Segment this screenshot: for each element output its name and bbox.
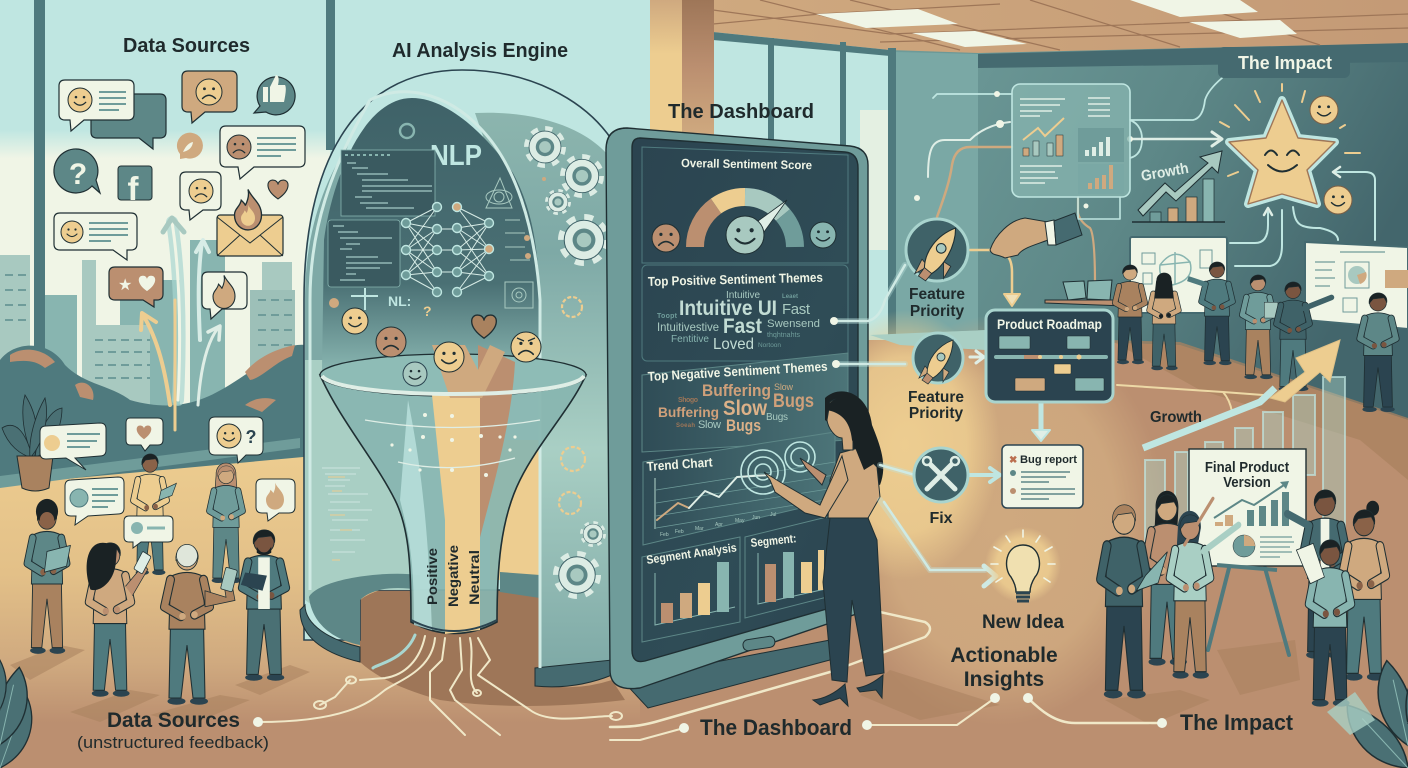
whiteboards: [1045, 237, 1408, 329]
code window 1: [341, 150, 435, 216]
gauge face: [726, 216, 764, 254]
potted plant: [2, 395, 62, 491]
icon: feature priority rocket 1: [906, 219, 968, 281]
month labels: May: [735, 518, 745, 524]
easel legs: [1208, 568, 1289, 655]
board title: Version: [1223, 473, 1271, 490]
person: man in suit: [1287, 490, 1347, 659]
person: bearded man with jacket: [241, 530, 286, 681]
person: with tablet behind: [134, 454, 176, 575]
shoes: [813, 675, 883, 706]
word cloud: Fentitive: [671, 334, 709, 345]
milestones: [999, 336, 1104, 391]
badge: The Impact: [1218, 47, 1350, 78]
stream: pale positive: [400, 400, 432, 630]
feedback bubbles cloud: [54, 71, 305, 319]
far windows: [700, 0, 910, 340]
person: afro with tablet: [28, 499, 70, 654]
trend line: [657, 475, 770, 520]
bubble: sad tan: [182, 71, 237, 123]
bubble: flame: [202, 272, 247, 319]
inner dark arch: [322, 98, 540, 370]
right glass panel: [475, 113, 612, 672]
panel: product roadmap: [986, 310, 1113, 402]
label: Feature Priority 1: Feature: [909, 286, 965, 303]
word cloud: thqhtnahts: [767, 332, 800, 339]
month labels: Apr: [715, 522, 723, 528]
person: man with arm raised: [1188, 262, 1233, 365]
person: holding clipboard right: [1360, 293, 1396, 412]
person: woman with bun: [1342, 501, 1386, 681]
dashboard device: [606, 128, 868, 708]
month labels: [660, 512, 776, 538]
decorative corner plants: [0, 640, 1408, 768]
right floor: [640, 345, 1408, 768]
woman at dashboard: [764, 391, 884, 706]
star with smiles: [1220, 84, 1360, 214]
word cloud: Buffering: [658, 404, 719, 420]
board 2: [1305, 242, 1408, 329]
person: pointing at board: [1276, 282, 1332, 391]
people: feedback crowd: [28, 454, 286, 705]
icon: sad face: [376, 327, 406, 357]
funnel rings: [365, 420, 540, 468]
people: final review team: [1101, 490, 1386, 707]
month labels: Feb: [660, 532, 669, 538]
label: Growth on floor: Growth: [1150, 409, 1202, 426]
AI analysis dome: [300, 70, 625, 706]
column: [650, 0, 682, 135]
title: Segment:: [750, 531, 797, 550]
people: back team: [1115, 262, 1396, 412]
month labels: Feb: [675, 529, 684, 535]
happy face: [810, 222, 836, 248]
gauge: [695, 197, 795, 247]
word cloud: [658, 381, 814, 435]
dome base band: [300, 572, 612, 687]
bubble: happy review: [54, 213, 137, 260]
center window: [330, 0, 660, 470]
left window with sky: [0, 0, 340, 480]
bubble: sad review: [220, 126, 305, 179]
title: Top Negative Sentiment Themes: [647, 359, 828, 384]
bubble: smile review: [59, 80, 134, 131]
label: Feature Priority 1: Priority: [910, 303, 965, 320]
screen: [632, 138, 858, 662]
word cloud: Swensend: [767, 318, 820, 330]
rim interior: [320, 354, 586, 396]
board chart: [1214, 481, 1289, 526]
icon: smile face: [342, 308, 368, 334]
title: Overall Sentiment Score: [681, 156, 812, 172]
heading: Data Sources: Data Sources: [123, 35, 250, 57]
sparkle data: [390, 413, 517, 477]
person: with clipboard: [1115, 265, 1145, 364]
tan floor seen through dome: [490, 440, 540, 580]
word cloud: Fast: [723, 315, 762, 338]
analytics hologram panel: [1012, 84, 1130, 197]
word cloud: Toopt: [657, 313, 678, 320]
neural network: [402, 202, 494, 296]
bubble: neutral review: [40, 423, 106, 470]
rays: [1220, 84, 1360, 176]
person: woman from back: [1149, 273, 1179, 370]
card title: Bug report: [1020, 454, 1077, 466]
board: [1189, 449, 1306, 566]
card: bug report: [1002, 445, 1083, 508]
icon: feather bubble: [177, 133, 203, 159]
label: Fix: Fix: [929, 510, 953, 527]
word cloud: Shogo: [678, 397, 698, 404]
person: older man with phone: [164, 544, 238, 705]
person: woman in teal sweater: [210, 463, 242, 583]
funnel rim highlight: [322, 376, 584, 394]
icon: angry face: [511, 332, 541, 362]
word cloud: Nortoon: [758, 343, 781, 349]
big arrow: [1270, 340, 1340, 402]
torso: [828, 448, 880, 518]
caption: Data Sources: Data Sources: [107, 709, 240, 732]
panel: overall sentiment: [642, 147, 848, 263]
person: woman curly hair: [87, 543, 151, 697]
crowd bubbles: [40, 417, 295, 548]
right wall: [895, 40, 1408, 420]
month labels: Jun: [752, 515, 760, 521]
axis and grid: [655, 462, 835, 529]
word cloud: Intuitivestive: [657, 320, 719, 334]
trees outside: [0, 345, 325, 485]
bezel: [606, 128, 868, 689]
bubble: fire: [256, 479, 295, 521]
caption: The Impact: The Impact: [1180, 710, 1294, 735]
badge: The Impact: The Impact: [1238, 53, 1332, 73]
word cloud: Buffering: [702, 381, 771, 400]
atom glyph and data: [400, 124, 533, 308]
bubble: heart: [126, 418, 163, 451]
bars: [758, 550, 830, 604]
star outline: [1229, 100, 1335, 204]
title: Product Roadmap: [997, 317, 1102, 332]
bubble: smile question: ?: [246, 427, 256, 447]
panel: positive themes: [642, 265, 848, 361]
funnel with sentiment streams: [320, 345, 586, 634]
glow dots: [329, 177, 546, 308]
icon: question bubble: [54, 149, 100, 193]
word cloud: Loved: [713, 336, 754, 353]
connection roots and bottom flow: [253, 612, 1167, 740]
stand base: [622, 640, 830, 708]
label: Positive: Positive: [424, 548, 440, 605]
label: Neutral: Neutral: [466, 550, 482, 605]
bubble: smile question: [209, 417, 263, 463]
bubble: star and heart: [109, 267, 163, 307]
star face: [1265, 150, 1299, 172]
easel tray: [1217, 565, 1277, 570]
needle: [758, 200, 787, 232]
person: with tablet: [1242, 275, 1278, 379]
funnel bottom edge: [411, 620, 497, 631]
title: Top Positive Sentiment Themes: [648, 270, 823, 289]
desk with laptops: [1045, 280, 1125, 306]
dome floor: [360, 585, 625, 706]
bubble: comment: [124, 516, 173, 548]
left floor: [0, 445, 640, 768]
pants: [823, 518, 884, 682]
word cloud: Slow: [698, 419, 721, 431]
heading: AI Analysis Engine: AI Analysis Engine: [392, 40, 568, 62]
label: Feature Priority 2: Priority: [909, 405, 964, 422]
word cloud: Leaet: [782, 294, 798, 300]
city skyline: [0, 240, 295, 445]
label: Actionable Insights: Insights: [964, 668, 1044, 691]
person: man from back with clipboard: [1296, 540, 1351, 707]
bubble: profile review: [65, 477, 124, 525]
home button: [742, 636, 776, 651]
word cloud: Fast: [782, 301, 811, 318]
panel: segment analysis: [642, 537, 740, 642]
easel with final product board: [1189, 449, 1306, 655]
word cloud: Intuitive UI: [679, 297, 777, 320]
word cloud: Intuitive: [726, 290, 760, 301]
person: woman in tan with dark hair: [1146, 491, 1188, 666]
face: [827, 399, 853, 450]
smile 1: [1310, 96, 1338, 124]
bubble: star and heart: ★: [118, 277, 132, 294]
upward data arrows: [141, 218, 220, 430]
icon: question bubble: ?: [69, 158, 87, 191]
fragments: NL:: [388, 293, 411, 309]
icon: neutral smile: [403, 362, 427, 386]
word cloud: Bugs: [726, 416, 761, 435]
label: Growth: [1140, 160, 1190, 185]
feedback faces falling into funnel: [342, 308, 541, 386]
panel: segment second: [745, 515, 835, 618]
right room connectors: [830, 78, 1375, 586]
timeline: [994, 354, 1108, 360]
word cloud: Soeah: [676, 423, 695, 429]
fragments: [351, 288, 432, 319]
front hair: [826, 397, 880, 470]
gears: [527, 129, 606, 595]
bubble: unhappy face: [180, 172, 221, 220]
word cloud: Bugs: [766, 412, 788, 423]
word cloud: Slow: [723, 397, 768, 420]
person: glasses man in navy sweater: [1101, 505, 1167, 698]
NLP label: NLP: [430, 140, 482, 172]
heading: The Dashboard: The Dashboard: [668, 101, 814, 123]
back hair: [825, 391, 883, 485]
window mullions: [34, 0, 896, 410]
tan spray: [432, 345, 505, 398]
person: woman pointing in pale shirt: [1170, 498, 1239, 679]
caption: The Dashboard: The Dashboard: [700, 715, 852, 740]
arch highlight: [310, 92, 540, 668]
label: Actionable Insights: Actionable: [950, 644, 1058, 667]
title: Trend Chart: [646, 454, 714, 474]
icon: thumbs up: [254, 75, 295, 115]
code window 2: [328, 220, 400, 287]
icon: fix tools: [914, 448, 968, 502]
icon: broken heart: [472, 315, 496, 338]
board 1: [1130, 237, 1227, 313]
bars: [655, 562, 735, 625]
icon: facebook: f: [128, 170, 140, 207]
stream: tan: [432, 395, 480, 634]
card: bug report: ✖: [1009, 455, 1017, 466]
icon: heart: [268, 180, 288, 199]
ghost growth bars and arrow: [1143, 340, 1345, 577]
spark gear: [559, 297, 585, 514]
lower code window: [322, 468, 372, 552]
left glass strip: [305, 145, 348, 370]
funnel glass: [320, 375, 586, 634]
icon: facebook: [118, 166, 152, 207]
icon: flaming envelope: [217, 189, 283, 256]
smile 2: [1324, 186, 1352, 214]
icon: feature priority rocket 2: [913, 333, 963, 384]
label: Negative: Negative: [445, 545, 461, 607]
month labels: Jul: [770, 512, 776, 518]
panel: negative themes: [642, 353, 848, 452]
icon: new idea bulb: [985, 527, 1061, 603]
ceiling: [705, 0, 1408, 53]
label: New Idea: New Idea: [982, 612, 1064, 633]
pie chart and notes: [1233, 535, 1294, 557]
fragments: ?: [423, 303, 432, 319]
star: [1229, 100, 1335, 204]
icon: reaching hand: [990, 213, 1082, 258]
dome glass body: [304, 70, 612, 672]
title: Segment Analysis: [645, 540, 738, 567]
word cloud: Slow: [774, 382, 794, 392]
word cloud: Bugs: [773, 391, 814, 412]
bars: [1150, 179, 1214, 222]
month labels: Mar: [695, 526, 704, 532]
arrow: [1138, 151, 1222, 216]
floor shadows: [10, 640, 1300, 725]
stream: brown: [478, 345, 515, 545]
word cloud: [657, 290, 820, 353]
caption: unstructured feedback: (unstructured feedback): [77, 733, 269, 752]
board title: Final Product: [1205, 458, 1289, 475]
label: Feature Priority 2: Feature: [908, 389, 964, 406]
icon: big smile: [434, 342, 464, 372]
bubble: dark comment: [91, 94, 166, 149]
touch rings: [741, 442, 815, 494]
growth chart on wall: [1132, 151, 1225, 222]
sad face: [652, 224, 680, 252]
left glass lower: [305, 360, 410, 640]
panel: trend chart: [643, 432, 835, 545]
arms: [764, 456, 848, 518]
